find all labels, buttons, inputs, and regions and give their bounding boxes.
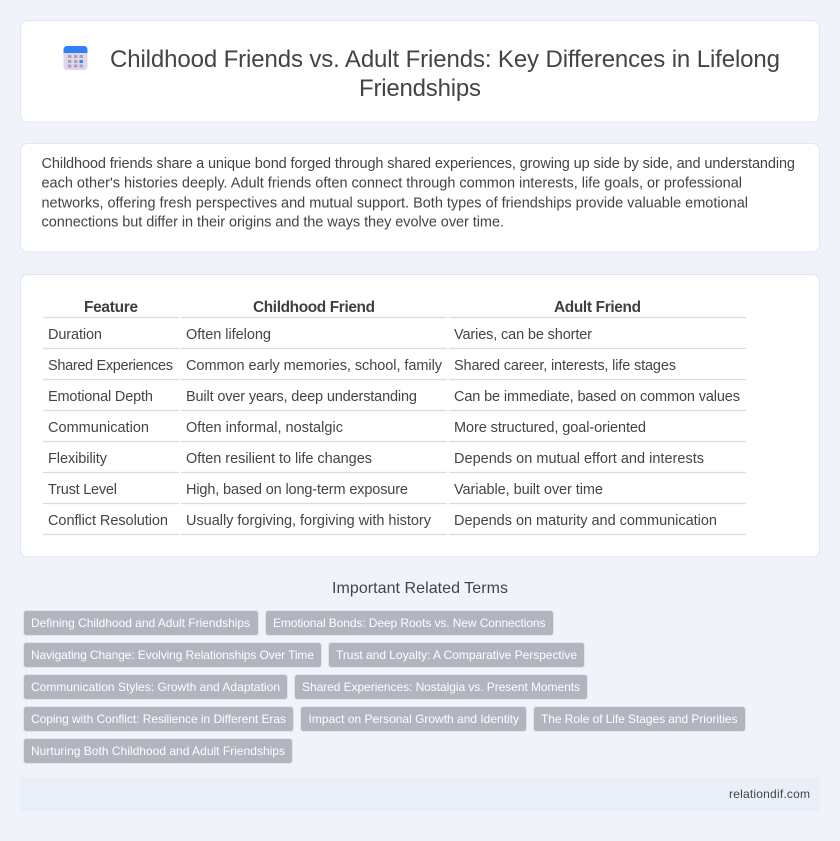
tag: Communication Styles: Growth and Adaptation <box>31 680 280 694</box>
panel: title header <box>20 20 820 122</box>
tag <box>294 674 588 700</box>
row: trust level <box>48 482 603 498</box>
tag: Trust and Loyalty: A Comparative Perspective <box>336 648 577 662</box>
icon: calendar <box>64 46 88 70</box>
tag: Shared Experiences: Nostalgia vs. Present Moments <box>302 680 580 694</box>
row: emotional depth: Emotional Depth <box>48 389 153 405</box>
tag <box>24 642 322 668</box>
tag: Nurturing Both Childhood and Adult Friendships <box>31 744 285 758</box>
footer: relationdif.com <box>729 787 810 801</box>
row: duration: Often lifelong <box>186 327 271 343</box>
related term tags <box>24 610 746 764</box>
panel: introduction <box>20 144 820 252</box>
tag <box>24 706 294 732</box>
row: conflict resolution: Depends on maturity and communication <box>454 513 717 529</box>
tag: Coping with Conflict: Resilience in Different Eras <box>31 712 286 726</box>
title: Childhood Friends vs. Adult Friends: Key Differences in Lifelong <box>110 46 780 73</box>
tag: The Role of Life Stages and Priorities <box>541 712 738 726</box>
row: conflict resolution: Usually forgiving, forgiving with history <box>186 513 432 529</box>
row: shared experiences: Common early memories, school, family <box>186 358 443 374</box>
table header row <box>84 299 641 316</box>
intro text block <box>42 156 795 230</box>
tag: Navigating Change: Evolving Relationships Over Time <box>31 648 314 662</box>
row: communication: Communication <box>48 420 149 436</box>
row: communication: Often informal, nostalgic <box>186 420 343 436</box>
tag <box>24 610 258 636</box>
tag: Impact on Personal Growth and Identity <box>308 712 519 726</box>
row: shared experiences <box>48 358 676 374</box>
tag <box>266 610 554 636</box>
row: shared experiences: Shared Experiences <box>48 358 173 374</box>
tag <box>24 738 292 764</box>
row: flexibility: Flexibility <box>48 451 108 467</box>
title: Friendships <box>359 75 481 102</box>
row: communication: More structured, goal-oriented <box>454 420 646 436</box>
intro text block: networks, offering fresh perspectives and mutual support. Both types of friendships provide valuable emotional <box>42 196 748 212</box>
intro text block: connections but differ in their origins and the ways they evolve over time. <box>42 214 504 230</box>
footer <box>20 777 820 811</box>
intro text block: each other's histories deeply. Adult friends often connect through common interests, life goals, or professional <box>42 176 742 192</box>
row: communication <box>48 420 646 436</box>
row: conflict resolution <box>48 513 717 529</box>
tag: Emotional Bonds: Deep Roots vs. New Connections <box>273 616 546 630</box>
row: duration: Varies, can be shorter <box>454 327 592 343</box>
row: conflict resolution: Conflict Resolution <box>48 513 168 529</box>
row: flexibility: Often resilient to life changes <box>186 451 372 467</box>
tag: Defining Childhood and Adult Friendships <box>31 616 250 630</box>
row: duration <box>48 327 592 343</box>
intro text block: Childhood friends share a unique bond forged through shared experiences, growing up side by side, and understanding <box>42 156 795 172</box>
tag <box>24 674 288 700</box>
panel: comparison table <box>20 274 820 557</box>
row: emotional depth: Built over years, deep understanding <box>186 389 417 405</box>
table header row: Childhood Friend <box>253 299 375 316</box>
heading: related terms: Important Related Terms <box>332 580 508 597</box>
row: shared experiences: Shared career, interests, life stages <box>454 358 676 374</box>
row: emotional depth <box>48 389 740 405</box>
row: emotional depth: Can be immediate, based on common values <box>454 389 740 405</box>
row: trust level: High, based on long-term exposure <box>186 482 408 498</box>
row: flexibility: Depends on mutual effort and interests <box>454 451 704 467</box>
table header row: Feature <box>84 299 138 316</box>
row: duration: Duration <box>48 327 102 343</box>
row: trust level: Variable, built over time <box>454 482 603 498</box>
title <box>110 46 780 102</box>
tag <box>300 706 526 732</box>
row: flexibility <box>48 451 704 467</box>
table header row: Adult Friend <box>554 299 641 316</box>
tag <box>534 706 746 732</box>
row: trust level: Trust Level <box>48 482 117 498</box>
tag <box>328 642 584 668</box>
